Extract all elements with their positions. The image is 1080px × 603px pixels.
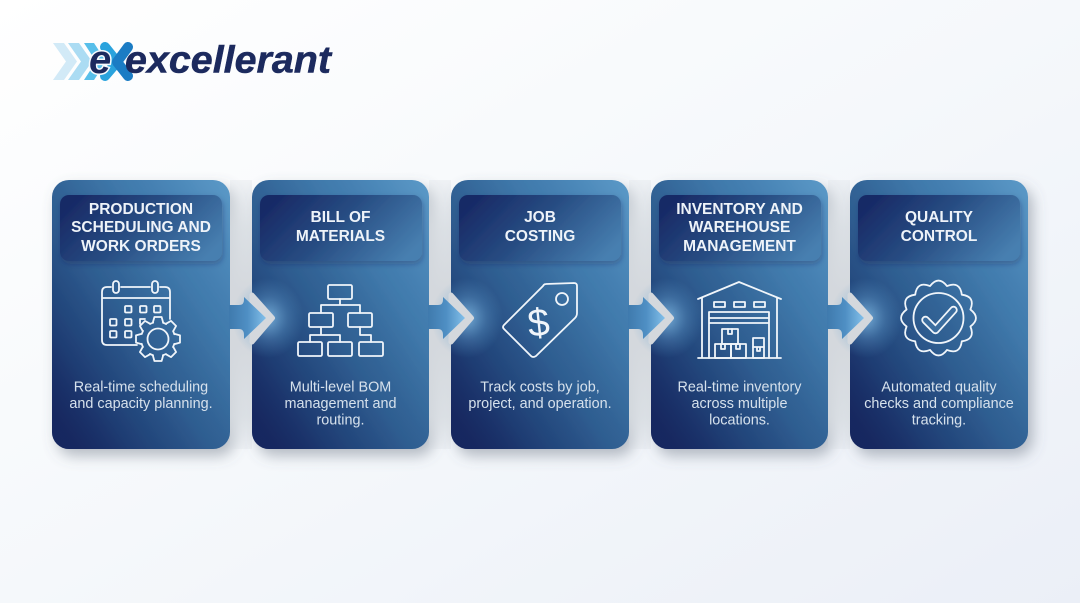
description: project, and operation. — [468, 396, 612, 412]
panel: inventory and warehouse management — [651, 180, 828, 449]
arrow: BOM to costing — [428, 180, 503, 449]
panel: bill of materials — [252, 180, 429, 449]
logo: excellerant: e — [89, 38, 111, 82]
description: across multiple — [692, 396, 787, 412]
description: checks and compliance — [864, 396, 1014, 412]
icon: price tag: $ — [526, 301, 552, 346]
description: routing. — [316, 412, 364, 428]
heading: production scheduling: PRODUCTION — [89, 201, 193, 218]
heading: bill of materials — [260, 195, 422, 261]
description: tracking. — [912, 412, 966, 428]
heading: quality control: CONTROL — [901, 228, 977, 245]
icon: hierarchy tree — [298, 285, 383, 356]
panel: job costing — [451, 180, 629, 449]
icon: calendar with gear — [102, 281, 180, 361]
heading: inventory and warehouse: MANAGEMENT — [683, 238, 796, 255]
icon: quality badge — [901, 281, 976, 355]
description: and capacity planning. — [69, 396, 213, 412]
heading: job costing — [459, 195, 621, 261]
description: Multi-level BOM — [290, 380, 391, 396]
heading: bill of materials: MATERIALS — [296, 228, 385, 245]
arrow: inventory to quality — [827, 180, 902, 449]
logo: excellerant — [53, 38, 332, 82]
icon: warehouse — [698, 282, 781, 358]
description: locations. — [709, 412, 770, 428]
arrow: costing to inventory — [628, 180, 703, 449]
description: Real-time inventory — [678, 380, 802, 396]
description: Track costs by job, — [480, 380, 600, 396]
heading: quality control: QUALITY — [905, 209, 974, 226]
heading: production scheduling: WORK ORDERS — [81, 238, 201, 255]
description: Automated quality — [881, 380, 997, 396]
heading: inventory and warehouse: WAREHOUSE — [689, 219, 790, 236]
heading: job costing: COSTING — [505, 228, 575, 245]
icon: price tag — [503, 283, 577, 357]
heading: production scheduling: SCHEDULING AND — [71, 219, 211, 236]
heading: job costing: JOB — [524, 209, 556, 226]
heading: inventory and warehouse: INVENTORY AND — [676, 201, 803, 218]
panel: quality control — [850, 180, 1028, 449]
panel: production scheduling and work orders — [52, 180, 230, 449]
description: management and — [284, 396, 397, 412]
heading: quality control — [858, 195, 1020, 261]
arrow: scheduling to BOM — [229, 180, 304, 449]
heading: production scheduling — [60, 195, 222, 261]
description: Real-time scheduling — [74, 380, 208, 396]
logo: excellerant: excellerant — [125, 40, 332, 82]
heading: inventory and warehouse — [659, 195, 821, 261]
heading: bill of materials: BILL OF — [310, 209, 370, 226]
